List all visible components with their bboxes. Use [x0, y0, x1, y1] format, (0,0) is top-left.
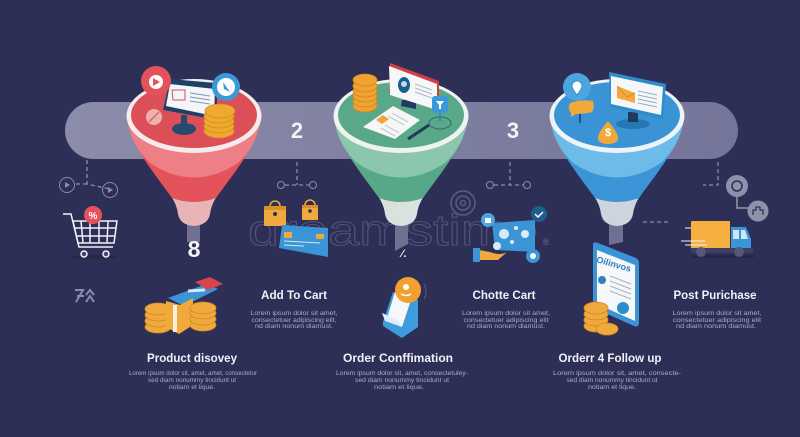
block: choice cart: nd diam nonum diamust. [467, 324, 545, 330]
block: choice cart [462, 288, 550, 330]
icon: coin stack [204, 104, 235, 138]
block: order follow up: sed diam nonummy tincidunt ut [566, 378, 658, 384]
block: add to cart: Lorem ipsum dolor sit amet, [250, 311, 338, 317]
block: order confirmation: notiam et lique. [374, 385, 424, 391]
icon: money bag: $ [605, 127, 611, 139]
profile monitor [389, 63, 439, 110]
block: order follow up [553, 351, 681, 391]
block: order follow up: notiam et lique. [588, 385, 636, 391]
icon: filter pin [429, 96, 451, 129]
step slash mark: ⁄. [399, 248, 406, 260]
block: add to cart: nd diam nonum diamust. [255, 324, 333, 330]
block: add to cart: consectetuer adipiscing elit, [252, 318, 337, 324]
icon: credit card [279, 225, 328, 257]
timeline bar [65, 102, 738, 159]
block: order confirmation [336, 351, 468, 391]
block: product discovery [129, 351, 257, 391]
icon: money bag [598, 121, 618, 144]
block: order follow up: Lorem ipsum dolor sit, amet, consecte- [553, 371, 681, 377]
connector 3 [486, 162, 530, 188]
icon: coin stack [353, 74, 377, 112]
funnel 2: green [334, 63, 468, 251]
block: product discovery: Product disovey [147, 351, 237, 365]
block: add to cart [250, 288, 338, 330]
block: choice cart: Chotte Cart [472, 288, 536, 302]
block: order follow up: Orderr 4 Follow up [558, 351, 662, 365]
icon: order box with badge [382, 277, 426, 338]
block: order confirmation: Order Conffimation [343, 351, 453, 365]
block: choice cart: Lorem ipsum dolor sit amet, [462, 311, 550, 317]
icon: delivery truck [681, 221, 754, 258]
icon: pill [146, 109, 162, 125]
icon: blue badge [212, 73, 240, 101]
icon: chat bubble [569, 100, 594, 123]
block: add to cart: Add To Cart [261, 288, 327, 302]
block: choice cart: consectetuer adipiscing elit [464, 318, 549, 324]
funnel 1: red [126, 66, 262, 242]
watermark text: dreamstime [248, 206, 538, 255]
icon: shopping cart [63, 206, 119, 259]
block: order confirmation: sed diam nonummy tincidunt ut [355, 378, 449, 384]
connector 1 [60, 160, 118, 198]
icon: pen [408, 125, 429, 139]
icon: gift box with coins [145, 277, 223, 334]
icon: location badge [563, 73, 591, 101]
registered mark: ® [543, 237, 550, 247]
connector 2 [278, 162, 316, 188]
document [363, 106, 420, 139]
block: product discovery: Lorem ipsum dolor sit, amet, amet, consectetur [129, 371, 257, 377]
icon: play badge [141, 66, 171, 96]
block: post purchase: nd diam nonum diamust. [676, 324, 756, 330]
step number 8: 8 [188, 236, 201, 262]
block: product discovery: sed diam nonummy tincidunt ut [148, 378, 236, 384]
email monitor [609, 72, 666, 129]
dashes under funnel 3 [643, 221, 668, 223]
icon: tablet with coins: Oilinvos [595, 254, 632, 274]
icon: tablet with coins [584, 242, 639, 335]
block: order confirmation: Lorem ipsum dolor sit, amet, consectetuley- [336, 371, 468, 377]
block: post purchase: consectetuer adipiscing elit [673, 318, 761, 324]
block: product discovery: notiam et lique. [169, 385, 215, 391]
funnel 3: blue [550, 72, 684, 245]
watermark logo [451, 191, 475, 215]
icon: shopping cart: % [89, 211, 98, 222]
step number 3: 3 [507, 118, 519, 143]
block: post purchase: Post Purichase [674, 288, 757, 302]
connector 4 [703, 162, 768, 222]
step number 2: 2 [291, 118, 303, 143]
icon: choice card with hand [473, 206, 547, 263]
icon: shopping bags [264, 200, 318, 226]
block: post purchase: Lorem ipsum dolor sit amet, [672, 311, 762, 317]
block: post purchase [672, 288, 762, 330]
icon: small arrows mark [75, 290, 94, 302]
monitor [163, 79, 218, 135]
